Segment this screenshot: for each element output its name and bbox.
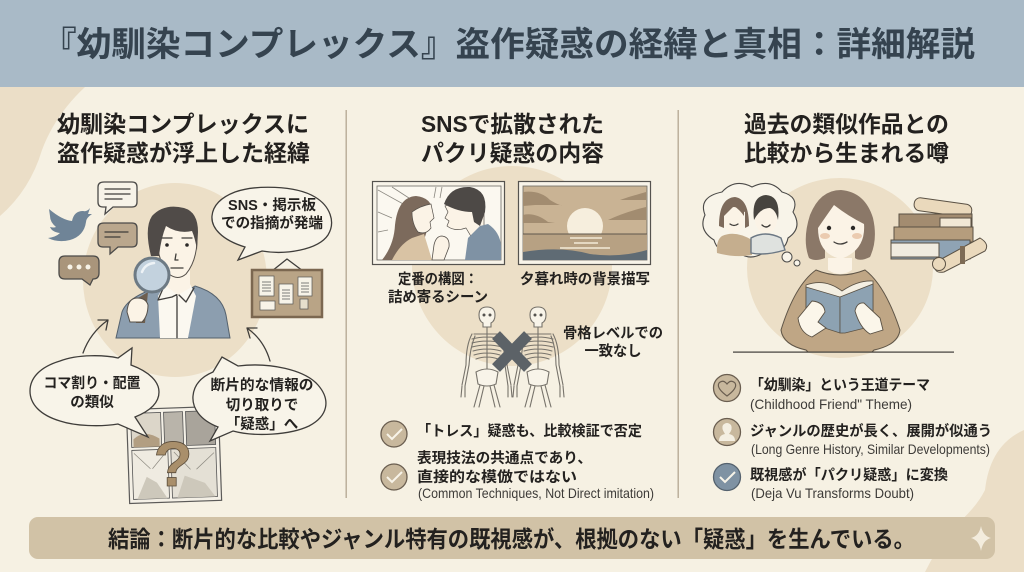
icon: text bubble [98, 182, 137, 214]
panel heading [421, 111, 604, 166]
panel heading: パクリ疑惑の内容 [421, 140, 604, 166]
check item: techniques: (Common Techniques, Not Direct imitation) [418, 485, 654, 501]
caption: skeleton: 骨格レベルでの [563, 324, 663, 342]
list item: childhood friend theme: 「幼馴染」という王道テーマ [750, 377, 930, 394]
panel heading: 過去の類似作品との [744, 111, 949, 137]
list item: childhood friend theme: (Childhood Friend" Theme) [750, 396, 912, 412]
speech bubble: lower left: コマ割り・配置 [44, 375, 140, 392]
panel heading: 比較から生まれる噂 [744, 140, 949, 166]
background circle [83, 183, 267, 377]
panel heading [744, 111, 949, 166]
icon: question mark: ? [153, 428, 193, 500]
arrow: bottom right to man [247, 328, 270, 361]
panel: how the suspicion emerged [30, 111, 332, 504]
image: sunset scene [518, 182, 650, 264]
background blob: bottom right [925, 430, 1024, 572]
panel: content of the accusations [372, 111, 663, 501]
title band [0, 0, 1024, 87]
panel heading: 盗作疑惑が浮上した経緯 [57, 140, 310, 166]
list item: deja vu: 既視感が「パクリ疑惑」に変換 [750, 466, 948, 484]
check item: techniques: 直接的な模倣ではない [417, 468, 577, 486]
list item: deja vu: (Deja Vu Transforms Doubt) [751, 485, 914, 501]
caption: confrontation scene [388, 270, 488, 306]
illustration: pile of books and scrolls [891, 197, 987, 272]
speech bubble: lower left: の類似 [70, 394, 114, 411]
list item: genre history [714, 418, 992, 457]
panel heading: SNSで拡散された [421, 111, 604, 137]
background circle [747, 178, 933, 358]
image: confrontation scene [372, 182, 504, 264]
table line [733, 352, 954, 353]
check item: trace: 「トレス」疑惑も、比較検証で否定 [417, 422, 642, 440]
icon: corkboard [252, 259, 322, 317]
skeleton: right [513, 307, 564, 407]
panel heading: 幼馴染コンプレックスに [57, 111, 309, 137]
panel heading [57, 111, 310, 166]
icon: cross [496, 335, 528, 368]
illustration: woman reading a book [781, 190, 900, 352]
illustration: man with magnifying glass [116, 207, 230, 338]
check item: techniques [381, 449, 654, 501]
caption: skeleton [563, 324, 663, 360]
conclusion bar: 結論：断片的な比較やジャンル特有の既視感が、根拠のない「疑惑」を生んでいる。 [108, 526, 915, 552]
illustration: manga page with question mark [126, 406, 222, 504]
arrow: bottom left to man [83, 320, 108, 353]
speech bubble: lower right: 「疑惑」へ [226, 415, 298, 433]
speech bubble: SNS [212, 187, 332, 260]
conclusion bar [29, 517, 995, 559]
caption: skeleton: 一致なし [584, 343, 642, 360]
panel: comparison with past works [703, 111, 992, 501]
speech bubble: SNS: SNS・掲示板 [228, 197, 316, 214]
icon: sparkle [971, 526, 991, 551]
caption: confrontation scene: 詰め寄るシーン [388, 288, 488, 306]
list item: deja vu [714, 464, 948, 501]
illustration: two skeletons [461, 307, 564, 407]
check item: trace [381, 421, 642, 447]
background circle [412, 166, 612, 366]
skeleton: left [461, 307, 512, 407]
speech bubble: lower left [30, 348, 159, 437]
caption: confrontation scene: 定番の構図： [398, 270, 478, 288]
speech bubble: SNS: での指摘が発端 [221, 214, 324, 232]
icon: dots bubble [59, 256, 99, 285]
icon: tan bubble [98, 223, 137, 254]
list item: genre history: ジャンルの歴史が長く、展開が似通う [750, 422, 992, 440]
caption: sunset scene: 夕暮れ時の背景描写 [520, 270, 650, 288]
background blob: top left [0, 87, 85, 216]
check item: techniques: 表現技法の共通点であり、 [417, 449, 592, 467]
icon: bird [48, 208, 92, 241]
list item: childhood friend theme [714, 374, 930, 412]
speech bubble: lower right: 断片的な情報の [210, 376, 314, 394]
speech bubble: lower right: 切り取りで [226, 397, 298, 414]
title: 『幼馴染コンプレックス』盗作疑惑の経緯と真相：詳細解説 [42, 26, 975, 64]
speech bubble: lower right [193, 357, 326, 441]
list item: genre history: (Long Genre History, Similar Developments) [751, 441, 990, 457]
illustration: thought bubble [703, 183, 800, 266]
